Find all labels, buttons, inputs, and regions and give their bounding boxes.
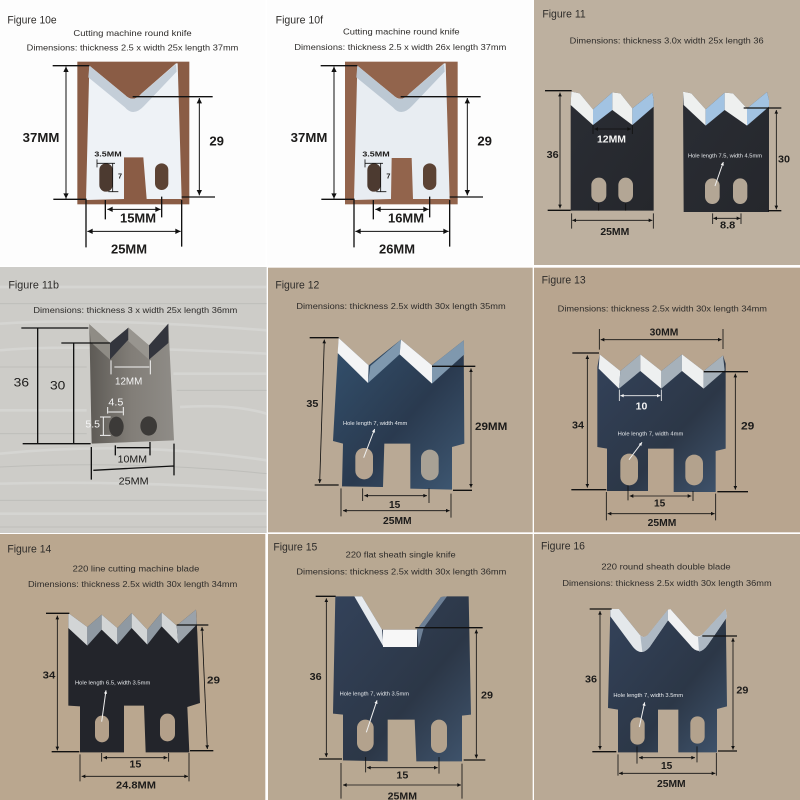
label 36: 36 (14, 375, 29, 389)
label 25MM: 25MM (657, 779, 686, 790)
dimension lines (590, 609, 737, 776)
label 29: 29 (477, 134, 492, 149)
blade (68, 610, 200, 752)
blade (86, 63, 182, 200)
dimension lines (310, 338, 475, 518)
dimension lines (571, 329, 748, 520)
label 36: 36 (547, 150, 559, 161)
label 16MM: 16MM (388, 211, 424, 226)
label 4.5: 4.5 (108, 398, 124, 409)
hole annotation: Hole length 7, width 3.5mm (340, 692, 409, 698)
wood grain (0, 287, 267, 527)
wood backdrop (345, 62, 458, 204)
panel: Figure 13 (534, 268, 800, 532)
dimensions text: Dimensions: thickness 2.5x width 30x length 36mm (562, 578, 772, 588)
label 3.5MM: 3.5MM (94, 150, 122, 159)
label 8.8: 8.8 (720, 221, 736, 232)
label 24.8MM: 24.8MM (116, 781, 156, 792)
label 30: 30 (50, 379, 66, 393)
hole annotation: Hole length 7, width 4mm (343, 421, 408, 427)
panel: Figure 14 (0, 534, 265, 800)
hole annotation: Hole length 7, width 4mm (618, 431, 684, 437)
dimensions text: Dimensions: thickness 2.5x width 30x length 35mm (296, 301, 506, 311)
dimension lines (316, 596, 485, 799)
label 25MM: 25MM (383, 516, 412, 527)
wood backdrop (77, 62, 189, 204)
dimensions text: Dimensions: thickness 2.5x width 30x length 34mm (558, 303, 767, 313)
label 25MM: 25MM (600, 227, 629, 238)
label 29MM: 29MM (475, 421, 507, 433)
label 25MM: 25MM (648, 518, 676, 529)
panel: Figure 15 (268, 534, 533, 800)
label 29: 29 (741, 421, 754, 433)
label 37MM: 37MM (291, 130, 327, 145)
label 10MM: 10MM (118, 455, 147, 466)
figure label 12: Figure 12 (275, 279, 319, 291)
right blade (683, 92, 769, 212)
panel: Figure 16 (534, 534, 800, 800)
label 12MM: 12MM (115, 376, 142, 387)
label 15: 15 (389, 500, 401, 511)
subtitle: 220 line cutting machine blade (73, 563, 200, 573)
label 34: 34 (572, 421, 584, 432)
blade (597, 354, 726, 492)
dimension lines (545, 91, 781, 229)
figure label 11b: Figure 11b (8, 279, 59, 291)
dimension lines (53, 66, 215, 247)
dimensions text: Dimensions: thickness 2.5 x width 26x length 37mm (294, 42, 506, 52)
label 10: 10 (636, 402, 647, 413)
label 35: 35 (306, 399, 319, 410)
label 15MM: 15MM (120, 211, 156, 226)
dimensions text: Dimensions: thickness 3 x width 25x length 36mm (33, 305, 237, 315)
left blade (571, 92, 654, 211)
label 34: 34 (43, 670, 56, 681)
panel: Figure 11b (0, 267, 267, 533)
figure label 10e: Figure 10e (7, 14, 57, 26)
label 37MM: 37MM (23, 130, 59, 145)
dimension lines (21, 328, 174, 480)
blade (333, 338, 464, 490)
dimension lines (321, 66, 483, 247)
label 36: 36 (310, 672, 322, 683)
figure label 13: Figure 13 (542, 275, 586, 287)
label 30: 30 (778, 155, 790, 166)
label 15: 15 (396, 770, 409, 781)
label 29: 29 (736, 685, 749, 696)
label 29: 29 (209, 134, 224, 149)
label 15: 15 (661, 761, 673, 772)
hole annotation: Hole length 7.5, width 4.5mm (688, 153, 762, 159)
dimensions text: Dimensions: thickness 2.5x width 30x length 36mm (296, 567, 506, 577)
subtitle: Cutting machine round knife (73, 28, 192, 38)
subtitle: 220 round sheath double blade (601, 562, 731, 572)
dimensions text: Dimensions: thickness 2.5x width 30x length 34mm (28, 579, 237, 589)
panel: Figure 12 (268, 268, 533, 532)
label 25MM: 25MM (119, 476, 149, 487)
label 29: 29 (481, 690, 493, 701)
hole annotation: Hole length 6.5, width 3.5mm (75, 680, 151, 686)
figure label 15: Figure 15 (273, 541, 317, 553)
dimensions text: Dimensions: thickness 3.0x width 25x length 36 (570, 36, 764, 46)
label 36: 36 (585, 674, 597, 685)
dimensions text: Dimensions: thickness 2.5 x width 25x length 37mm (27, 43, 238, 53)
figure label 16: Figure 16 (541, 541, 585, 553)
blade (89, 324, 174, 444)
panel: Figure 11 (534, 0, 800, 265)
label 15: 15 (654, 498, 666, 509)
subtitle: 220 flat sheath single knife (346, 549, 456, 559)
blade (333, 596, 471, 761)
label 7: 7 (118, 171, 122, 180)
label 3.5MM: 3.5MM (362, 150, 390, 159)
label 26MM: 26MM (379, 241, 415, 256)
dimension lines (46, 613, 213, 781)
label 15: 15 (129, 759, 142, 770)
blade (608, 609, 727, 752)
blade (354, 63, 450, 200)
label 29: 29 (207, 676, 220, 687)
panel: Figure 10f (267, 0, 533, 266)
figure label 14: Figure 14 (7, 543, 51, 555)
label 7: 7 (386, 171, 390, 180)
panel: Figure 10e (0, 0, 266, 266)
label 25MM: 25MM (111, 241, 147, 256)
label 5.5: 5.5 (85, 420, 100, 431)
figure label 10f: Figure 10f (276, 14, 323, 26)
figure label 11: Figure 11 (542, 8, 586, 20)
hole annotation: Hole length 7, width 3.5mm (613, 693, 683, 699)
subtitle: Cutting machine round knife (343, 27, 460, 37)
label 12MM: 12MM (597, 135, 626, 146)
label 30MM: 30MM (650, 328, 678, 339)
